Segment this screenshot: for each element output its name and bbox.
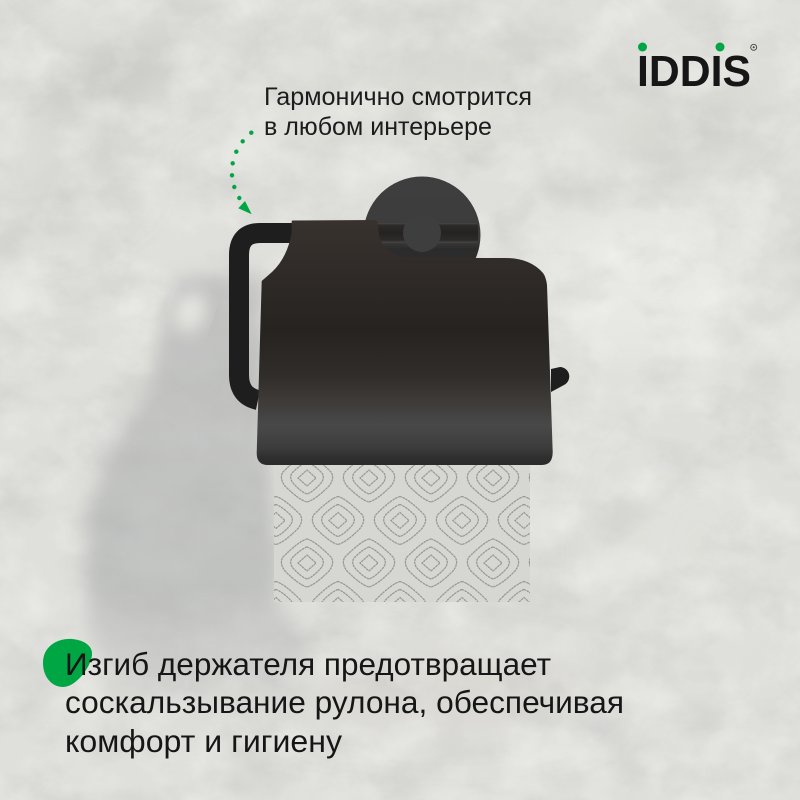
holder: horizontal rod bbox=[370, 223, 478, 243]
heading text with green accent: Изгиб держателя предотвращает bbox=[65, 646, 551, 682]
toilet paper roll sheet bbox=[274, 462, 530, 602]
heading text with green accent: комфорт и гигиену bbox=[65, 723, 342, 759]
holder: cover plate bbox=[257, 220, 553, 465]
callout text: в любом интерьере bbox=[264, 113, 492, 141]
holder: bent arm bbox=[239, 233, 300, 400]
heading text with green accent: соскальзывание рулона, обеспечивая bbox=[65, 684, 624, 720]
holder: arm highlight bbox=[241, 248, 245, 298]
holder: centre knob bbox=[403, 214, 441, 252]
holder: right end stop bbox=[551, 367, 569, 392]
callout text: Гармонично смотрится bbox=[264, 83, 532, 111]
arrow: dotted green curve bbox=[230, 130, 254, 214]
green accent blob bbox=[43, 639, 92, 687]
cast shadow of holder bbox=[85, 274, 310, 730]
heading text with green accent bbox=[43, 639, 624, 759]
callout text bbox=[264, 83, 532, 141]
logo: IDDIS: IDDIS bbox=[637, 47, 751, 96]
holder: wall plate bbox=[364, 176, 480, 294]
